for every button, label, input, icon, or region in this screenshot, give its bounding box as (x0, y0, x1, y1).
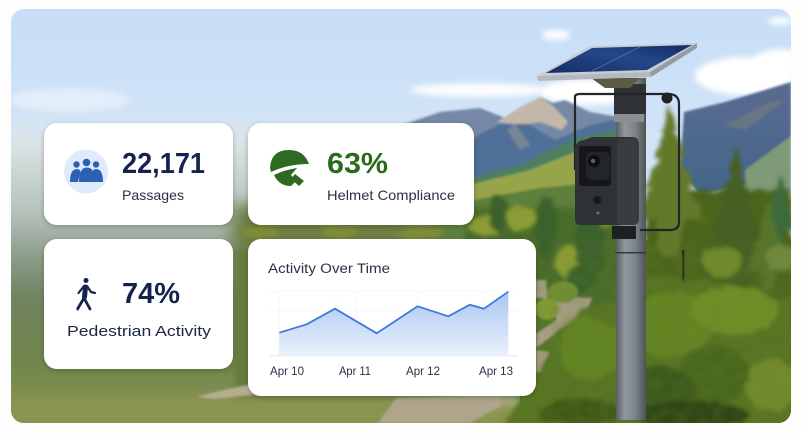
bracket arm (575, 94, 679, 230)
value: 22,171: 22,171 (122, 148, 205, 180)
icon: helmet (270, 150, 309, 186)
label: helmet compliance: Helmet Compliance (327, 187, 455, 203)
tree trunk (682, 250, 684, 282)
value: 74%: 74% (122, 278, 180, 310)
x-axis labels: Apr 12 (406, 366, 440, 378)
value: 63%: 63% (327, 148, 388, 180)
clouds (10, 18, 802, 112)
label: pedestrian activity: Pedestrian Activity (67, 323, 212, 340)
distant mountains (405, 82, 791, 240)
pole (616, 78, 646, 420)
foreground shrubs (501, 256, 791, 423)
mount under panel (591, 78, 640, 88)
card: activity over time (248, 239, 536, 396)
x-axis labels: Apr 13 (479, 366, 513, 378)
hazy valley and forest ground (11, 132, 400, 423)
label: passages: Passages (122, 187, 184, 203)
card: helmet compliance (248, 123, 474, 225)
card: passages (44, 123, 233, 225)
mid-ground forest (242, 192, 616, 304)
x-axis labels (270, 366, 513, 378)
solar camera pole (537, 43, 697, 420)
chart title: Activity Over Time (268, 261, 390, 276)
solar panel (537, 43, 697, 81)
x-axis labels: Apr 10 (270, 366, 304, 378)
card: pedestrian activity (44, 239, 233, 369)
x-axis labels: Apr 11 (339, 366, 371, 378)
icon: walking person (78, 278, 95, 309)
icon: group of people (64, 150, 108, 194)
winding road (197, 280, 592, 423)
line chart (270, 291, 518, 356)
camera body (575, 137, 639, 225)
right-hand firs (646, 103, 791, 298)
